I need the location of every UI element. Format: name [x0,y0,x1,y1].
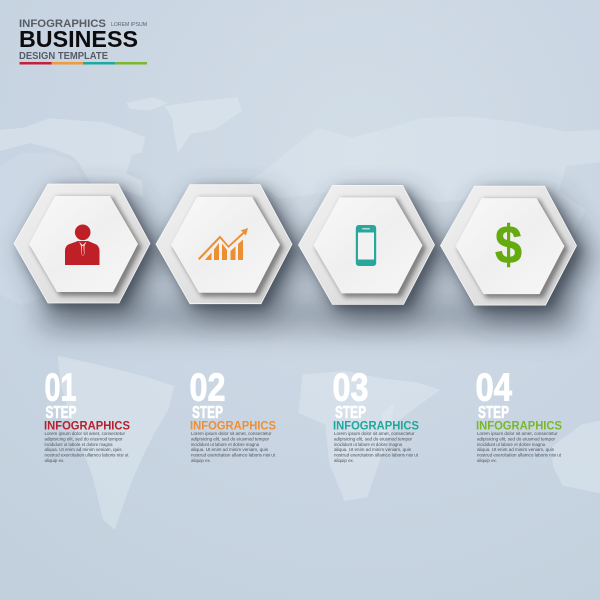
step 2 text: aliquip ex. [191,458,211,464]
title block [19,18,147,64]
step 4 text: INFOGRAPHICS [476,420,562,432]
step 4 text: 04 [476,366,512,410]
step 1 text: STEP [46,402,77,422]
step 1 text: incididunt ut labore et dolore magna [44,442,113,448]
step 1 text: INFOGRAPHICS [44,420,130,432]
hexagon 3 [298,185,434,304]
step 3 text: nostrud exercitation ullamco laboris nisi ut [334,453,419,459]
step 1 text: 01 [44,366,76,410]
hexagon 2 [156,185,292,304]
icon: smartphone [356,225,376,266]
step 3 text: incididunt ut labore et dolore magna [334,442,402,448]
icon: dollar sign: $ [495,215,522,275]
title block: LOREM IPSUM [111,22,147,28]
step 3 text: 03 [332,366,368,410]
step 2 text: Lorem ipsum dolor sit amet, consectetur [191,431,272,437]
step 3 text: adipisicing elit, sed do eiusmod tempor [334,436,412,442]
step 3 text: aliqua. Ut enim ad minim veniam, quis [334,447,412,453]
step 3 text: INFOGRAPHICS [333,420,419,432]
step 2 text: aliqua. Ut enim ad minim veniam, quis [191,447,269,453]
step 4 text [476,366,562,464]
step 4 text: nostrud exercitation ullamco laboris nisi ut [477,453,562,459]
step 1 text [44,366,130,464]
step 4 text: incididunt ut labore et dolore magna [477,442,545,448]
step 4 text: adipisicing elit, sed do eiusmod tempor [477,436,555,442]
title block: BUSINESS [19,26,138,52]
step 4 text: aliquip ex. [477,458,497,464]
hexagon 4 [440,186,576,305]
step 2 text: nostrud exercitation ullamco laboris nisi ut [191,453,276,459]
step 3 text: Lorem ipsum dolor sit amet, consectetur [334,431,415,437]
step 1 text: aliqua. Ut enim ad minim veniam, quis [44,447,122,453]
icon: growth chart [198,228,248,260]
step 4 text: aliqua. Ut enim ad minim veniam, quis [477,447,555,453]
step 1 text: adipisicing elit, sed do eiusmod tempor [44,436,123,442]
title block: INFOGRAPHICS [19,18,106,30]
title block: DESIGN TEMPLATE [19,51,108,62]
step 2 text: STEP [192,402,223,422]
step 3 text: aliquip ex. [334,458,354,464]
step 4 text: STEP [478,402,509,422]
step 4 text: Lorem ipsum dolor sit amet, consectetur [477,431,558,437]
icon: businessman [65,224,100,265]
hexagon 1 [14,184,150,303]
step 2 text: 02 [190,366,226,410]
step 2 text: incididunt ut labore et dolore magna [191,442,259,448]
hexagon drop shadows [18,187,592,332]
step 2 text: adipisicing elit, sed do eiusmod tempor [191,436,269,442]
step 3 text [332,366,419,464]
step 3 text: STEP [335,402,366,422]
step 1 text: aliquip ex. [44,458,64,464]
step 1 text: Lorem ipsum dolor sit amet, consectetur [44,431,125,437]
world map [0,97,600,530]
step 2 text: INFOGRAPHICS [190,420,276,432]
step 2 text [190,366,276,464]
step 1 text: nostrud exercitation ullamco laboris nisi ut [44,453,129,459]
